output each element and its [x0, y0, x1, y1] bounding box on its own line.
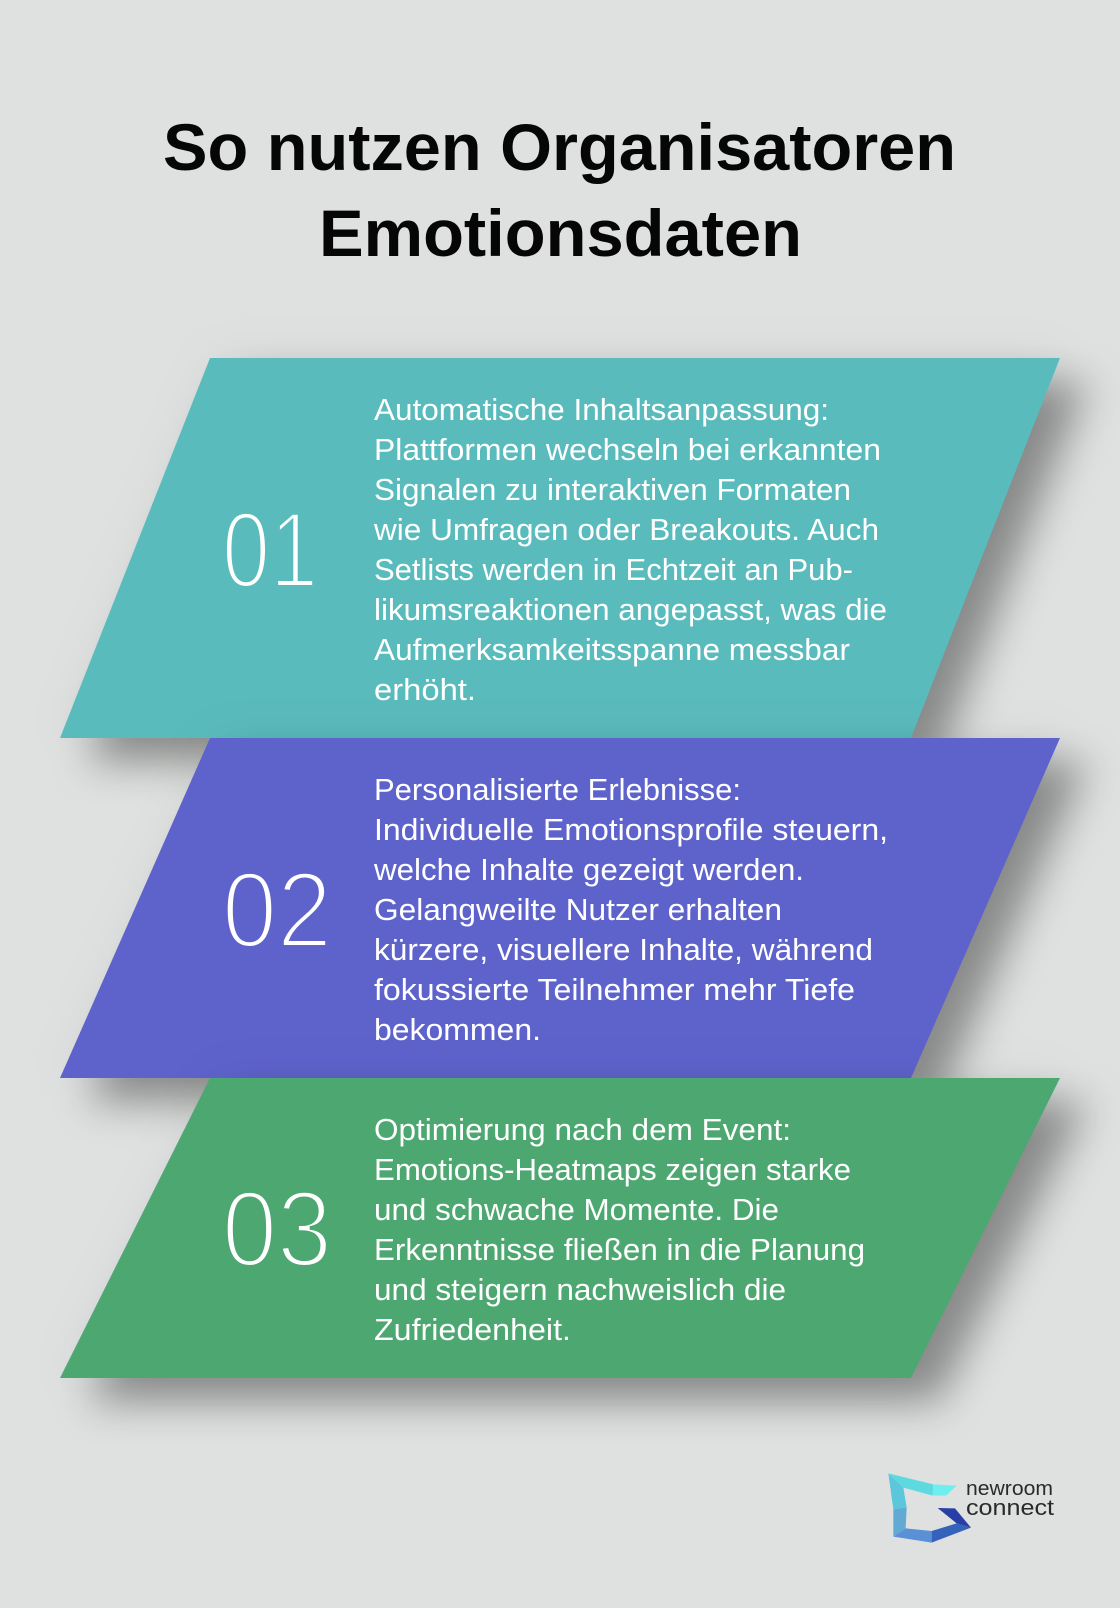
text block 02: Personalisierte Erlebnisse:: [374, 772, 741, 807]
logo: newroom connect: [888, 1473, 1054, 1543]
text block 02: Gelangweilte Nutzer erhalten: [374, 892, 782, 927]
panel: step 01: [60, 358, 1060, 738]
text block 01: [373, 392, 887, 707]
text block 02: [373, 772, 888, 1047]
icon: logo mark: [888, 1473, 971, 1543]
panel: step 02: [60, 738, 1060, 1078]
number 02: 02: [222, 849, 332, 970]
text block 02: kürzere, visuellere Inhalte, während: [374, 932, 873, 967]
text block 03: und schwache Momente. Die: [374, 1192, 779, 1227]
text block 01: wie Umfragen oder Breakouts. Auch: [373, 512, 879, 547]
text block 01: erhöht.: [374, 672, 476, 707]
parallelogram: green: [60, 1078, 1060, 1378]
text block 03: und steigern nachweislich die: [374, 1272, 786, 1307]
text block 03: Erkenntnisse fließen in die Planung: [374, 1232, 865, 1267]
panel: step 03: [60, 1078, 1060, 1378]
text block 01: Signalen zu interaktiven Formaten: [374, 472, 851, 507]
text block 01: Plattformen wechseln bei erkannten: [374, 432, 881, 467]
parallelogram: teal: [60, 358, 1060, 738]
number 03: 03: [222, 1168, 332, 1289]
title: [163, 110, 956, 270]
text block 02: Individuelle Emotionsprofile steuern,: [374, 812, 888, 847]
text block 01: likumsreaktionen angepasst, was die: [374, 592, 887, 627]
title: Emotionsdaten: [319, 196, 802, 270]
text block 01: Setlists werden in Echtzeit an Pub-: [374, 552, 853, 587]
text block 02: fokussierte Teilnehmer mehr Tiefe: [374, 972, 855, 1007]
text block 03: Optimierung nach dem Event:: [374, 1112, 791, 1147]
text block 03: Zufriedenheit.: [374, 1312, 571, 1347]
logo wordmark: newroom: [966, 1478, 1053, 1500]
text block 03: Emotions-Heatmaps zeigen starke: [374, 1152, 851, 1187]
title: So nutzen Organisatoren: [163, 110, 956, 184]
text block 01: Aufmerksamkeitsspanne messbar: [374, 632, 850, 667]
text block 03: [374, 1112, 865, 1347]
parallelogram: indigo: [60, 738, 1060, 1078]
logo wordmark: connect: [966, 1495, 1054, 1520]
text block 02: bekommen.: [374, 1012, 541, 1047]
text block 01: Automatische Inhaltsanpassung:: [374, 392, 829, 427]
logo wordmark: [966, 1478, 1054, 1520]
text block 02: welche Inhalte gezeigt werden.: [373, 852, 804, 887]
number 01: 01: [222, 489, 318, 610]
